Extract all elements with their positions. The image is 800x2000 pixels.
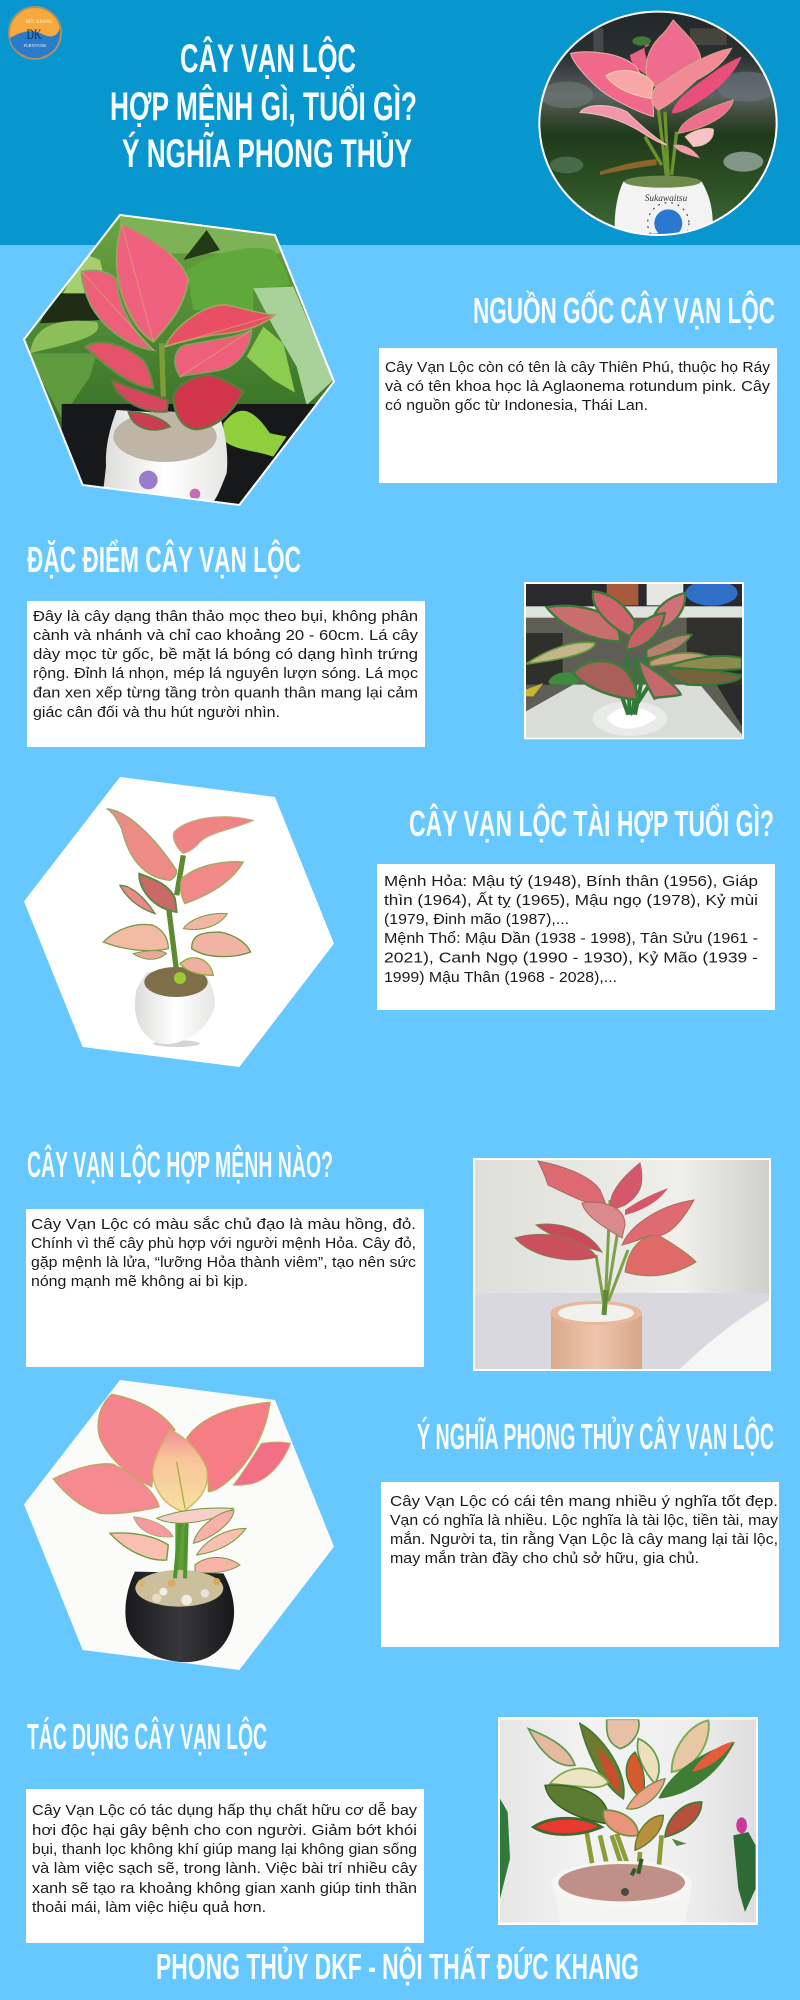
logo: Duc Khang Furniture: DK xyxy=(26,27,42,43)
text panel: tac dung: Cây Vạn Lộc có tác dụng hấp thụ chất hữu cơ dễ bay xyxy=(32,1802,418,1819)
header band xyxy=(0,0,800,245)
logo: Duc Khang Furniture: FURNITURE xyxy=(24,43,47,48)
text panel: tac dung xyxy=(26,1789,424,1943)
text panel: y nghia phong thuy: Cây Vạn Lộc có cái tên mang nhiều ý nghĩa tốt đẹp. xyxy=(390,1493,778,1510)
text panel: dac diem xyxy=(27,601,425,747)
text panel: nguon goc: có nguồn gốc từ Indonesia, Thái Lan. xyxy=(385,397,648,414)
text panel: y nghia phong thuy: may mắn tràn đầy cho chủ sở hữu, gia chủ. xyxy=(390,1550,699,1567)
text panel: hop menh: nóng mạnh mẽ không ai bì kịp. xyxy=(31,1273,248,1290)
title: HỢP MỆNH GÌ, TUỔI GÌ? xyxy=(110,82,417,129)
text panel: tac dung: hơi độc hại gây bệnh cho con người. Giảm bớt khói xyxy=(32,1822,417,1839)
text panel: dac diem: rộng. Đỉnh lá nhọn, mép lá nguyên lượn sóng. Lá mọc xyxy=(33,665,419,682)
text panel: hop tuoi: Mệnh Thổ: Mậu Dần (1938 - 1998), Tân Sửu (1961 - xyxy=(384,930,758,947)
text panel: hop menh: Cây Vạn Lộc có màu sắc chủ đạo là màu hồng, đỏ. xyxy=(31,1216,416,1233)
photo: plant in terracotta pot xyxy=(473,1158,771,1371)
photo: hexagon red-pink plant xyxy=(20,210,340,510)
text panel: dac diem: dày mọc từ gốc, bề mặt lá bóng có dạng hình trứng xyxy=(33,646,418,663)
text panel: hop menh: Chính vì thế cây phù hợp với người mệnh Hỏa. Cây đỏ, xyxy=(31,1235,416,1252)
text panel: tac dung: và làm việc sạch sẽ, trong lành. Việc bài trí nhiều cây xyxy=(32,1860,418,1877)
text panel: y nghia phong thuy: Vạn có nghĩa là nhiều. Lộc nghĩa là tài lộc, tiền tài, may xyxy=(390,1512,779,1529)
text panel: hop tuoi: thìn (1964), Ất tỵ (1965), Mậu ngọ (1978), Kỷ mùi xyxy=(384,892,758,909)
text panel: nguon goc: và có tên khoa học là Aglaonema rotundum pink. Cây xyxy=(385,378,771,395)
text panel: hop tuoi: 1999) Mậu Thân (1968 - 2028),... xyxy=(384,969,617,986)
text panel: nguon goc xyxy=(379,348,777,483)
text panel: hop tuoi: Mệnh Hỏa: Mậu tý (1948), Bính thân (1956), Giáp xyxy=(384,873,758,890)
heading: hop menh: CÂY VẠN LỘC HỢP MỆNH NÀO? xyxy=(27,1143,333,1185)
text panel: hop menh xyxy=(26,1209,424,1367)
title: CÂY VẠN LỘC xyxy=(180,35,356,81)
photo: round pink plant xyxy=(537,10,780,244)
title xyxy=(110,35,417,176)
logo: Duc Khang Furniture: ĐỨC KHANG xyxy=(26,19,52,25)
text panel: hop tuoi: 2021), Canh Ngọ (1990 - 1930), Kỷ Mão (1939 - xyxy=(384,950,758,966)
text panel: nguon goc: Cây Vạn Lộc còn có tên là cây Thiên Phú, thuộc họ Ráy xyxy=(385,359,771,376)
logo: Duc Khang Furniture xyxy=(9,7,61,59)
text panel: dac diem: cành và nhánh và chỉ cao khoảng 20 - 60cm. Lá cây xyxy=(33,627,419,644)
text panel: tac dung: bụi, thanh lọc không khí giúp mang lại không gian sống xyxy=(32,1841,417,1858)
photo: plant on shelf xyxy=(524,580,744,739)
photo: hexagon salmon plant on white xyxy=(24,777,334,1067)
text panel: y nghia phong thuy xyxy=(381,1482,779,1647)
text panel: dac diem: đan xen xếp từng tầng tròn quanh thân mang lại cảm xyxy=(33,684,418,702)
heading: tac dung: TÁC DỤNG CÂY VẠN LỘC xyxy=(27,1715,267,1757)
text panel: hop menh: gặp mệnh là lửa, “lưỡng Hỏa thành viêm”, tạo nên sức xyxy=(31,1254,417,1271)
text panel: tac dung: thoải mái, làm việc hiệu quả hơn. xyxy=(32,1899,266,1916)
heading: dac diem: ĐẶC ĐIỂM CÂY VẠN LỘC xyxy=(27,538,301,580)
title: Ý NGHĨA PHONG THỦY xyxy=(122,130,412,176)
photo: hexagon plant in black pot xyxy=(24,1380,334,1670)
text panel: tac dung: xanh sẽ tạo ra khoảng không gian xanh giúp tinh thần xyxy=(32,1880,417,1897)
text panel: hop tuoi xyxy=(377,864,775,1010)
text panel: hop tuoi: (1979, Đinh mão (1987),... xyxy=(384,911,569,928)
text panel: dac diem: Đây là cây dạng thân thảo mọc theo bụi, không phân xyxy=(33,608,418,625)
photo: variegated plant in white pot xyxy=(498,1717,758,1925)
photo: round pink plant: Sukawaitsu xyxy=(645,194,688,204)
text panel: dac diem: giác cân đối và thu hút người nhìn. xyxy=(33,704,280,721)
text panel: y nghia phong thuy: mắn. Người ta, tin rằng Vạn Lộc là cây mang lại tài lộc, xyxy=(390,1531,778,1548)
